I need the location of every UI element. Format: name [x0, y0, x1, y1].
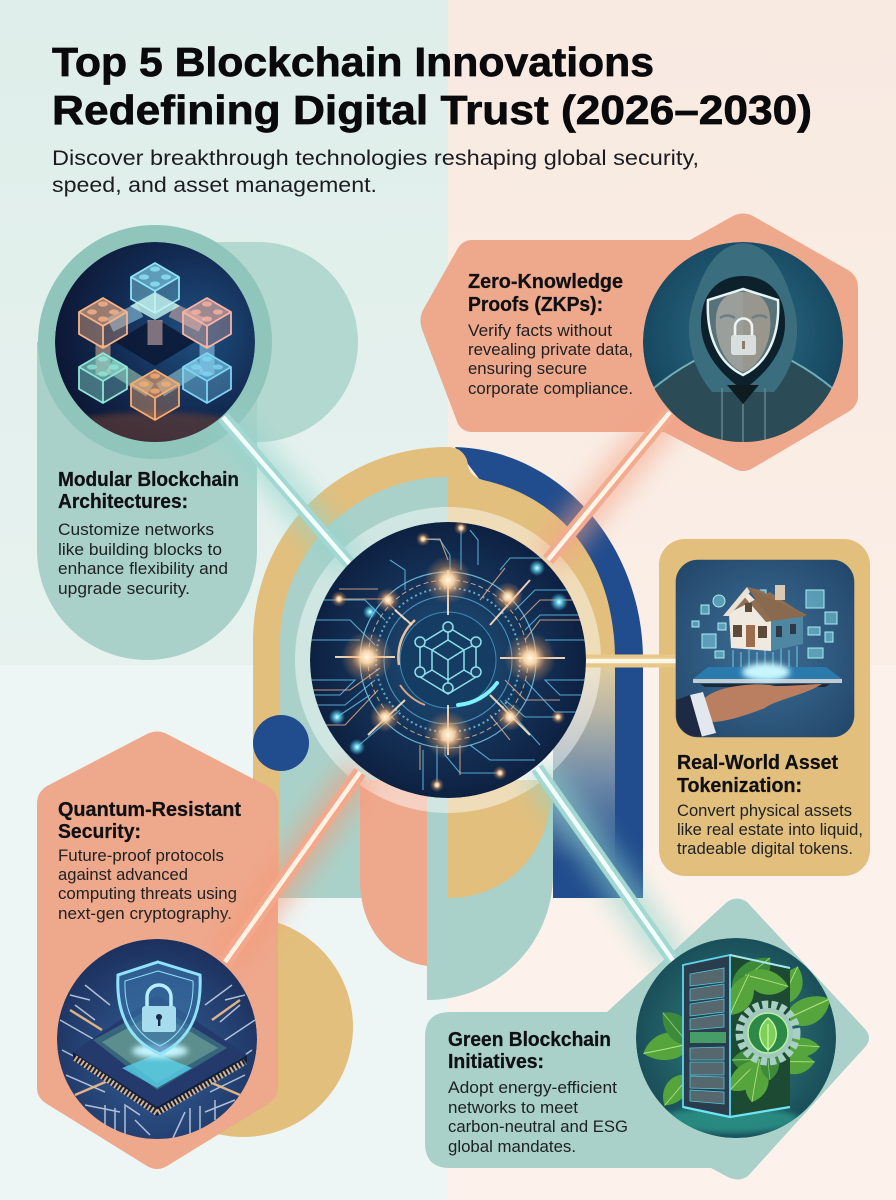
- connector: tokenization to core: [586, 646, 676, 676]
- server front: [683, 955, 730, 1117]
- central dark gap: [115, 318, 195, 366]
- faded right column: [553, 660, 615, 898]
- panel: real-world asset tokenization: [659, 539, 870, 876]
- heading: Initiatives:: [448, 1051, 544, 1073]
- body text: [58, 521, 228, 598]
- salmon hexagon: [37, 732, 278, 1169]
- illustration: house on tablet: [676, 560, 854, 737]
- hexagon cube icon: [415, 622, 481, 694]
- body text: like real estate into liquid,: [677, 821, 863, 839]
- left block: [79, 298, 127, 348]
- illustration: green server: [636, 938, 836, 1138]
- hoodie shoulders: [654, 362, 832, 442]
- body text: against advanced: [58, 866, 188, 884]
- body text: computing threats using: [58, 885, 237, 903]
- face: [716, 292, 770, 372]
- body text: Verify facts without: [468, 322, 612, 340]
- gold arch: [253, 447, 615, 800]
- body text: [58, 847, 237, 923]
- server side: [730, 955, 790, 1117]
- padlock: [147, 985, 171, 1007]
- body text: carbon-neutral and ESG: [448, 1118, 628, 1136]
- body text: Adopt energy-efficient: [448, 1079, 617, 1097]
- heading: [468, 271, 623, 316]
- body text: next-gen cryptography.: [58, 905, 232, 923]
- peach circuit traces: [310, 539, 586, 775]
- house blue side: [770, 612, 803, 651]
- blue dot: [253, 715, 309, 771]
- front block: [131, 370, 179, 420]
- title: Redefining Digital Trust (2026–2030): [52, 87, 812, 133]
- tablet: [693, 667, 842, 679]
- connector: modular to core: [223, 417, 350, 564]
- star rays: [335, 570, 565, 755]
- teal shape: [425, 898, 869, 1180]
- title: [52, 39, 812, 133]
- body text: Future-proof protocols: [58, 847, 224, 865]
- heading: Proofs (ZKPs):: [468, 294, 603, 316]
- panel: modular blockchain: [37, 225, 358, 660]
- lower right block: [183, 353, 231, 403]
- subtitle: Discover breakthrough technologies reshaping global security,: [52, 146, 699, 170]
- heading: Architectures:: [58, 491, 188, 513]
- concentric rings: [360, 572, 536, 748]
- glowing base: [683, 1107, 790, 1117]
- hand and cuff: [703, 684, 822, 722]
- salmon shape: [420, 214, 858, 471]
- shield: [708, 289, 778, 375]
- body text: enhance flexibility and: [58, 560, 228, 578]
- blue outer arch: [455, 447, 643, 898]
- central geometric arch shapes: [133, 447, 643, 1137]
- body text: Customize networks: [58, 521, 214, 539]
- heading: Zero-Knowledge: [468, 271, 623, 293]
- body text: upgrade security.: [58, 580, 190, 598]
- right leaves: [768, 964, 812, 1010]
- heading: [448, 1029, 611, 1073]
- door and windows: [746, 625, 755, 647]
- server drive bays: [690, 968, 724, 1104]
- translucent ring: [295, 507, 601, 813]
- back lobe: [155, 242, 358, 442]
- illustration: tokenization image border: [676, 560, 854, 737]
- teal body: [37, 342, 257, 660]
- house white front: [729, 592, 771, 651]
- halo disc: [38, 225, 272, 459]
- connector: zero-knowledge to core: [548, 412, 670, 560]
- connector: green to core: [537, 768, 674, 962]
- shield: [118, 962, 200, 1054]
- glow points: [329, 521, 568, 792]
- illustration: hooded figure: [643, 242, 843, 450]
- heading: Security:: [58, 821, 141, 843]
- body text: ensuring secure: [468, 360, 587, 378]
- left leaves: [643, 1031, 692, 1061]
- heading: [58, 469, 239, 513]
- connector: quantum to core: [225, 772, 360, 962]
- panel: green blockchain: [425, 898, 869, 1180]
- foliage on side: [724, 953, 779, 998]
- heading: Green Blockchain: [448, 1029, 611, 1051]
- chip die: [93, 1005, 227, 1090]
- illustration: modular blocks: [55, 242, 255, 444]
- gold card: [659, 539, 870, 876]
- heading: Tokenization:: [677, 775, 802, 797]
- right block: [183, 298, 231, 348]
- neck, zip and drawstrings: [727, 385, 759, 404]
- floating data icons: [692, 590, 837, 658]
- circuit traces: [60, 985, 255, 1140]
- gold quarter disc: [448, 780, 553, 898]
- heading: Modular Blockchain: [58, 469, 239, 491]
- panel: quantum-resistant security: [37, 732, 278, 1169]
- cyan circuit traces: [310, 528, 586, 790]
- body text: revealing private data,: [468, 341, 633, 359]
- subtitle: speed, and asset management.: [52, 173, 377, 197]
- panel: zero-knowledge proofs: [420, 214, 858, 471]
- teal inner arch: [280, 477, 448, 898]
- heading: [677, 752, 838, 797]
- heading: Quantum-Resistant: [58, 799, 241, 821]
- body text: tradeable digital tokens.: [677, 840, 853, 858]
- illustration: shield on chip: [57, 939, 257, 1140]
- title: Top 5 Blockchain Innovations: [52, 39, 654, 85]
- body text: corporate compliance.: [468, 380, 633, 398]
- central circuit illustration: [310, 521, 586, 798]
- lower left block: [79, 353, 127, 403]
- light beams under house: [732, 646, 798, 667]
- body text: [677, 802, 863, 858]
- body text: global mandates.: [448, 1138, 576, 1156]
- gold bottom-left disc: [133, 917, 353, 1137]
- padlock: [735, 318, 752, 336]
- top block: [131, 263, 179, 313]
- salmon lower shape: [360, 780, 427, 966]
- heading: Real-World Asset: [677, 752, 838, 774]
- server top edge: [730, 955, 790, 968]
- body text: Convert physical assets: [677, 802, 852, 820]
- gear with leaf: [740, 1005, 796, 1061]
- body text: [448, 1079, 628, 1156]
- subtitle: [52, 146, 699, 197]
- heading: [58, 799, 241, 843]
- body text: like building blocks to: [58, 541, 222, 559]
- base glow: [660, 1107, 800, 1133]
- hood: [689, 243, 797, 392]
- chip body: [78, 1017, 247, 1107]
- body text: networks to meet: [448, 1099, 578, 1117]
- roof: [723, 587, 807, 622]
- teal lower half disc: [427, 780, 553, 1000]
- connecting beams: [103, 310, 207, 390]
- body text: [468, 322, 633, 398]
